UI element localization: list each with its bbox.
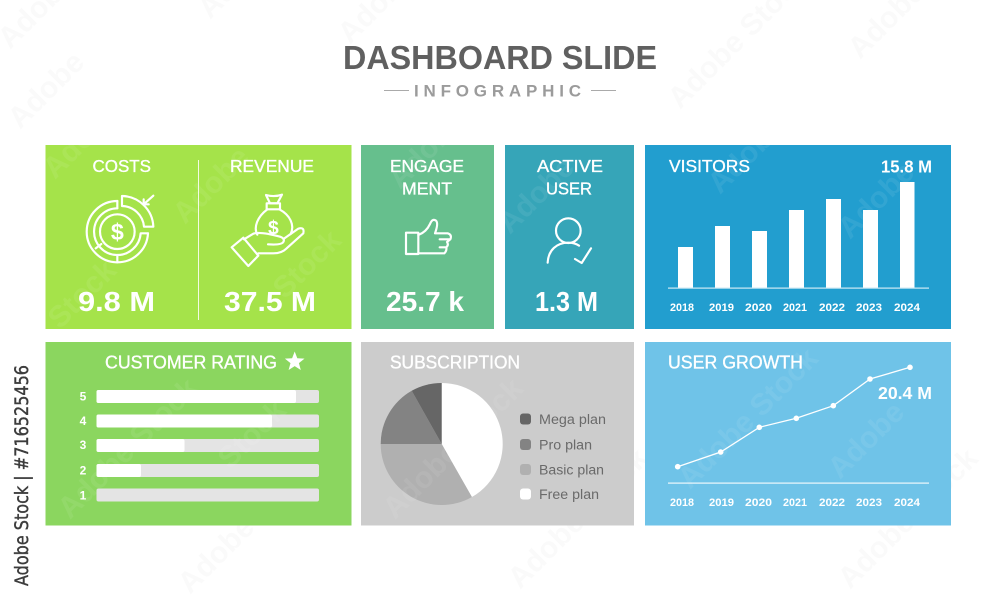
panel: engagement [361,145,494,329]
dashboard slide: Adobe [2,46,91,135]
line chart: user growth: 2021 [783,497,807,509]
value: engagement: 25.7 k [386,286,464,317]
value: revenue: 37.5 M [224,286,316,317]
heading: engagement: MENT [402,178,452,198]
panel: visitors [645,145,951,329]
bar chart: visitors: 2018 [670,302,694,314]
icon: star [285,352,304,370]
legend: subscription plans: Mega plan [539,412,606,427]
dashboard slide: Adobe Stock [672,342,825,495]
value: costs: 9.8 M [78,286,155,317]
icon: costs target [87,196,153,262]
legend: subscription plans: Pro plan [539,438,592,452]
dashboard slide: Adobe Stock [377,372,530,525]
bar chart: visitors: 2022 [819,302,845,314]
line chart: user growth: 2022 [819,497,845,509]
bar chart: visitors: 2021 [783,302,807,314]
bar chart: visitors: 2020 [745,302,772,314]
dashboard slide: Stock [267,224,348,305]
dashboard slide: Adobe [822,396,911,485]
bar chart: ratings: 3 [80,438,87,452]
heading: user growth: USER GROWTH [668,352,803,372]
legend: subscription plans [520,412,606,502]
icon: user check [548,218,591,263]
panel: active user [505,145,634,329]
icon: thumbs up [406,220,451,254]
panel: costs and revenue [46,145,352,329]
dashboard slide: Adobe [382,106,471,195]
value: active user: 1.3 M [535,286,598,317]
value: visitors: 15.8 M [881,156,932,176]
dashboard slide: Adobe Stock [832,442,985,595]
title [343,39,657,100]
title: INFOGRAPHIC [414,82,586,100]
heading: active user [537,156,603,198]
value: user growth: 20.4 M [878,383,932,403]
heading: engagement: ENGAGE [390,156,464,176]
bar chart: visitors: 2024 [894,302,921,314]
line chart: user growth: 2024 [894,497,921,509]
heading: active user: ACTIVE [537,156,603,176]
bar chart: visitors: 2023 [856,302,882,314]
bar chart: visitors [668,182,929,314]
heading: engagement [390,156,464,198]
title: DASHBOARD SLIDE [343,39,657,76]
icon: money bag in hand [232,195,304,266]
panel: customer rating [46,342,352,526]
bar chart: ratings: 2 [80,464,87,478]
heading: subscription: SUBSCRIPTION [390,352,520,372]
line chart: user growth: 2019 [709,497,734,509]
bar chart: ratings: 1 [80,488,87,502]
heading: revenue: REVENUE [230,156,314,176]
dashboard slide: Adobe [37,96,126,185]
bar chart: ratings [80,390,319,502]
bar chart: ratings: 5 [80,390,87,404]
dashboard slide: Adobe [492,151,581,240]
icon: money bag in hand: $ [268,218,279,239]
bar chart: visitors: 2019 [709,302,734,314]
dashboard slide: Stock [212,394,293,475]
icon: costs target: $ [111,219,124,245]
dashboard slide: Adobe Stock [52,372,205,525]
line chart: user growth: 2018 [670,497,694,509]
line chart: user growth: 2023 [856,497,882,509]
dashboard slide: Adobe [167,141,256,230]
line chart: user growth: 2020 [745,497,772,509]
heading: active user: USER [546,178,592,198]
dashboard slide: Adobe Stock [172,447,325,600]
legend: subscription plans: Basic plan [539,462,604,478]
dashboard slide: Stock [42,254,123,335]
legend: subscription plans: Free plan [539,487,599,502]
bar chart: ratings: 4 [80,414,87,428]
dashboard slide: Adobe Stock [502,442,655,595]
dashboard slide: Adobe [832,156,921,245]
panel: subscription [361,342,634,526]
heading: costs: COSTS [92,156,151,176]
line chart: user growth [668,364,929,509]
dashboard slide: Adobe [702,111,791,200]
heading: customer rating: CUSTOMER RATING [105,352,277,372]
pie chart: subscription plans [381,383,503,505]
heading: visitors: VISITORS [669,156,750,176]
panel: user growth [645,342,951,526]
stock credit text: Adobe Stock | #716525456 [11,365,33,586]
